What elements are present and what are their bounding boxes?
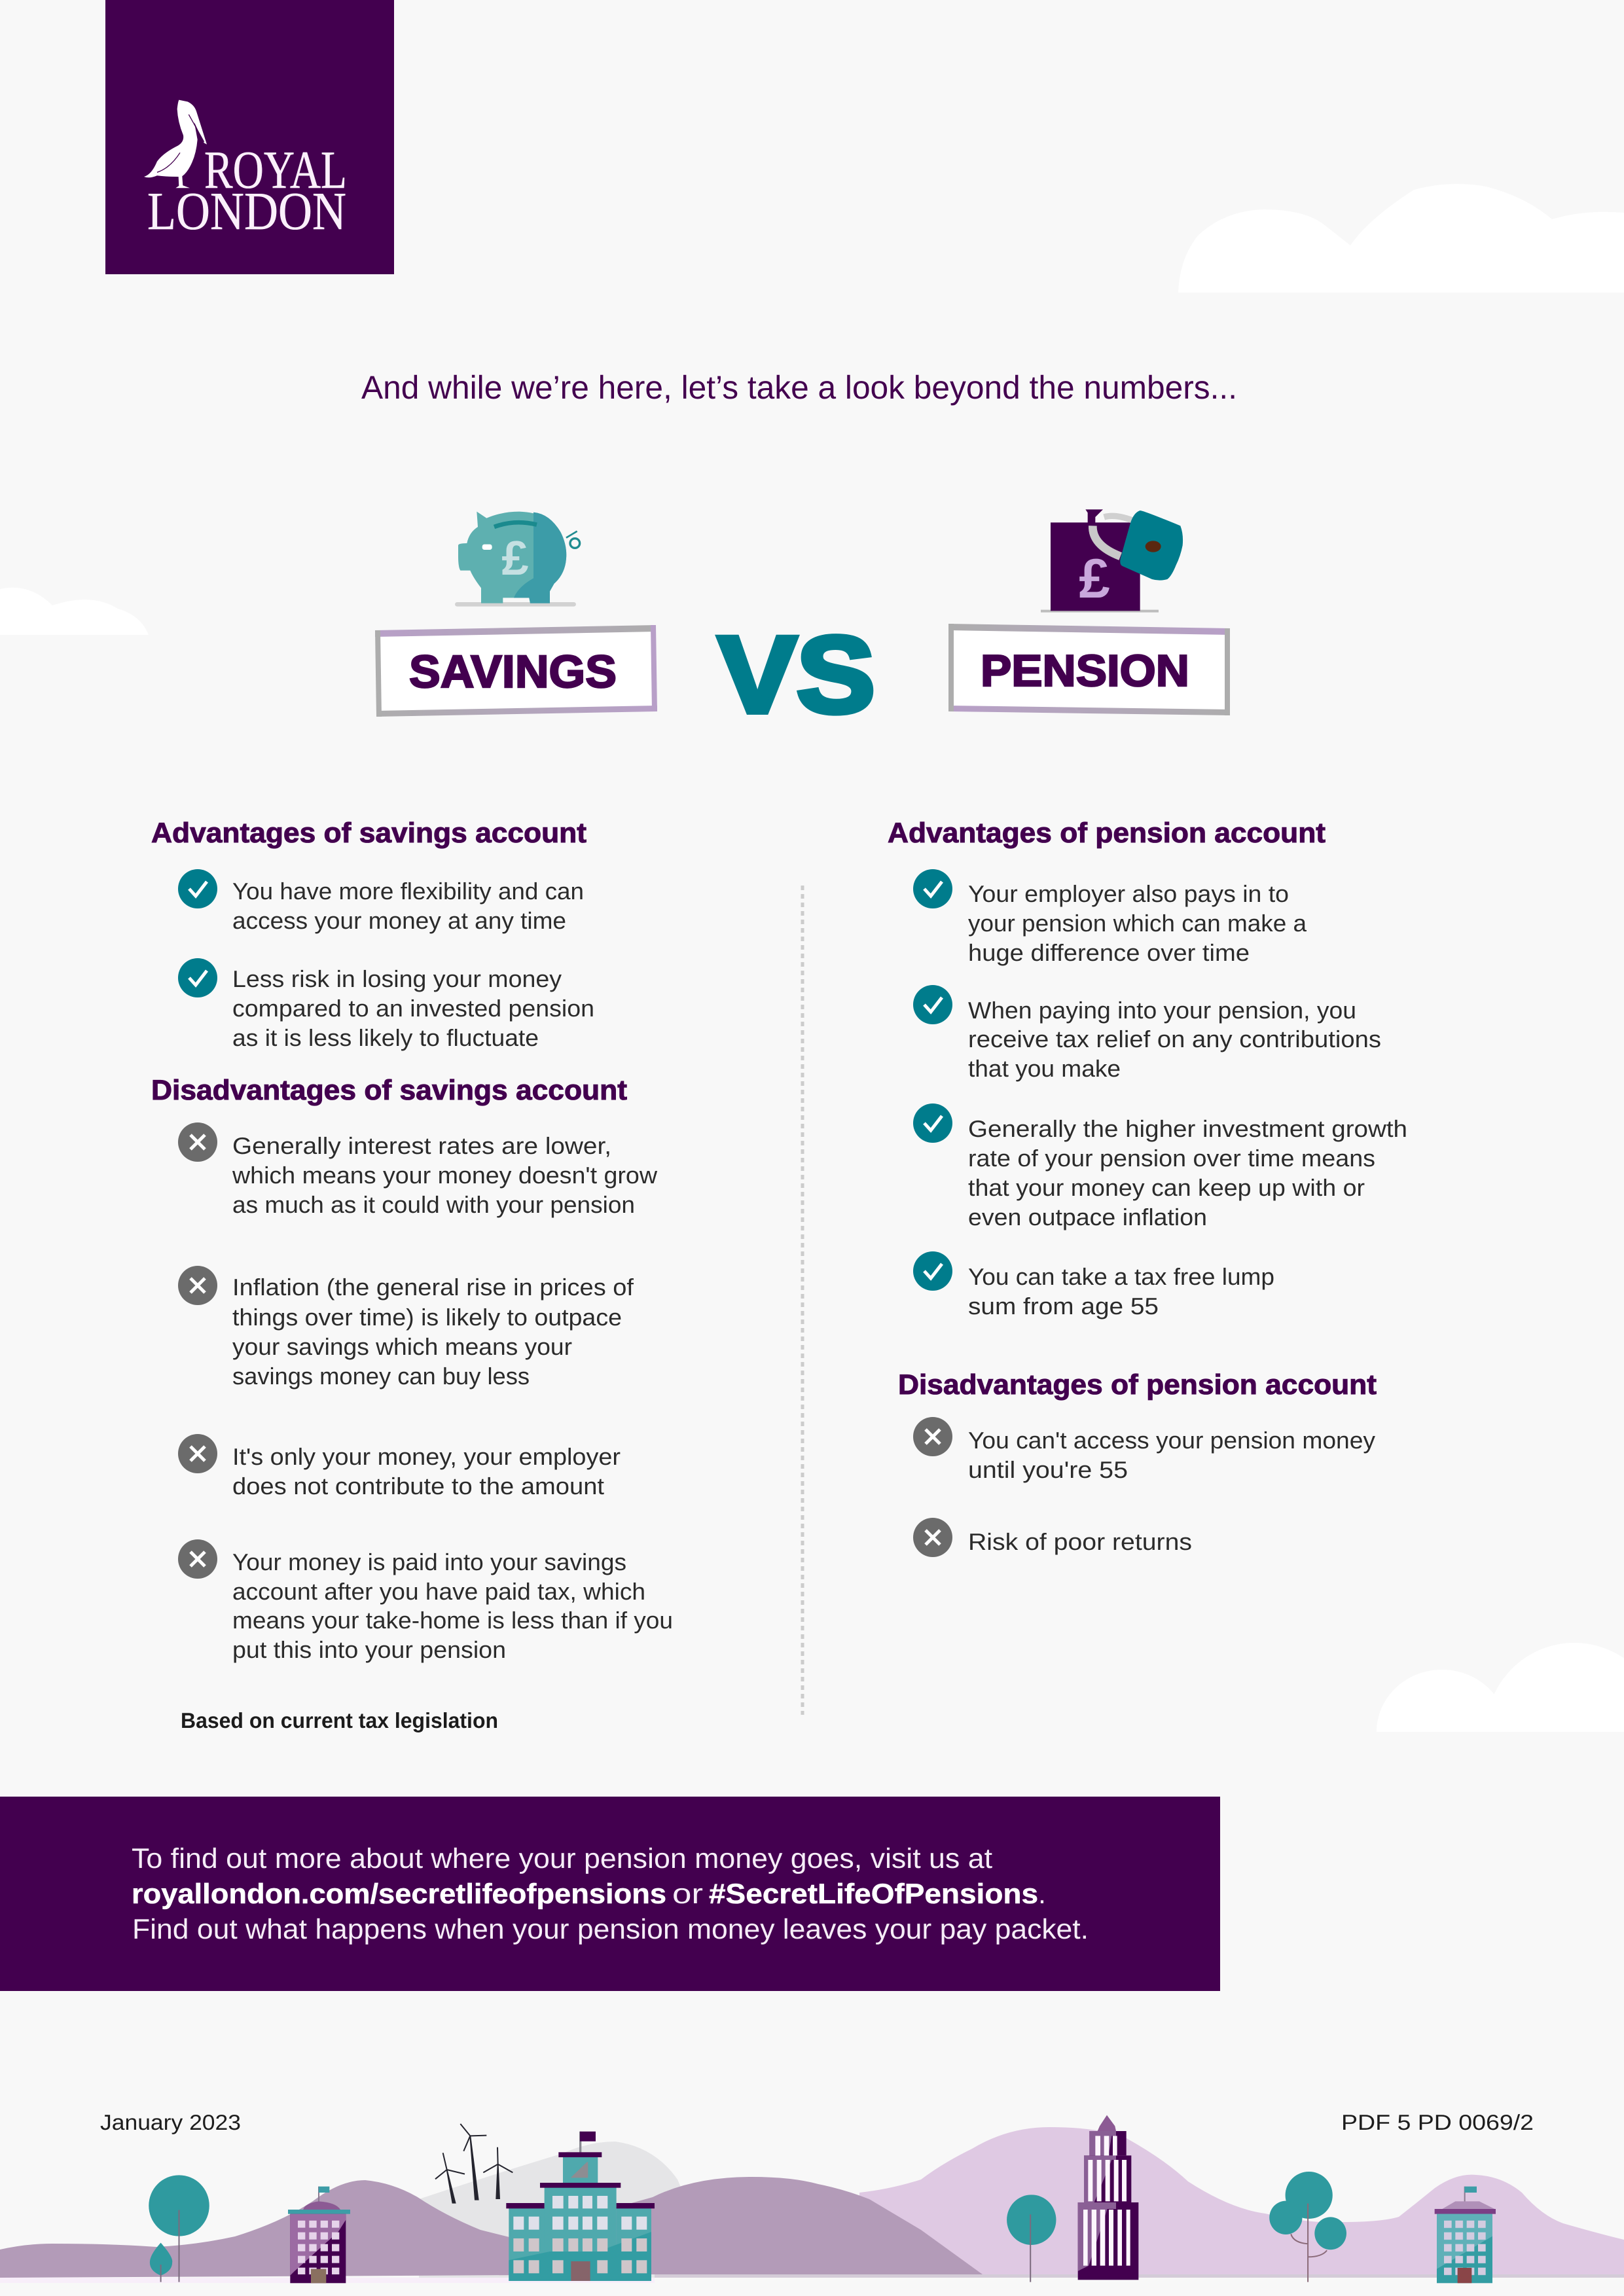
pension disadvantage 1 [913, 1417, 1375, 1483]
savings advantage 1: You have more flexibility and can [232, 878, 584, 905]
footnote: Based on current tax legislation [181, 1708, 498, 1732]
icon: pelican [144, 100, 207, 188]
title: And while we’re here, let’s take a look beyond the numbers... [361, 369, 1237, 406]
icon: pension bag with padlock: £ [1079, 548, 1110, 610]
savings disadvantage 2: Inflation (the general rise in prices of [232, 1274, 634, 1300]
call to action banner [0, 1797, 1220, 1991]
heading: disadvantages of pension account: Disadvantages of pension account [898, 1369, 1377, 1401]
pension advantage 4: sum from age 55 [968, 1293, 1159, 1319]
call to action banner: . [1038, 1878, 1046, 1910]
savings disadvantage 4 [178, 1539, 673, 1663]
heading: advantages of pension account: Advantages of pension account [888, 817, 1326, 849]
call to action banner: or [672, 1878, 703, 1910]
pension advantage 2: When paying into your pension, you [968, 997, 1356, 1024]
call to action banner: To find out more about where your pension money goes, visit us at [132, 1843, 992, 1874]
illustration: wind turbines [435, 2124, 513, 2204]
pension advantage 3: rate of your pension over time means [968, 1145, 1375, 1172]
illustration: purple building [288, 2187, 350, 2283]
illustration: small teal building [1435, 2187, 1496, 2283]
savings disadvantage 4: Your money is paid into your savings [232, 1549, 626, 1575]
savings disadvantage 4: account after you have paid tax, which [232, 1578, 645, 1605]
cloud: lower right [1377, 1643, 1624, 1732]
pension advantage 3: even outpace inflation [968, 1204, 1207, 1230]
illustration: purple tower [1078, 2115, 1138, 2280]
savings disadvantage 1 [178, 1122, 658, 1218]
cloud: top right [1178, 184, 1624, 293]
heading: advantages of savings account: Advantages of savings account [151, 817, 586, 849]
pension advantage 1: huge difference over time [968, 939, 1250, 966]
savings disadvantage 4: put this into your pension [232, 1636, 506, 1663]
panel: savings account [151, 817, 673, 1732]
pension advantage 4: You can take a tax free lump [968, 1263, 1274, 1290]
savings disadvantage 2: things over time) is likely to outpace [232, 1304, 622, 1331]
pension advantage 3: Generally the higher investment growth [968, 1115, 1407, 1142]
illustration: hills [0, 2127, 1624, 2283]
savings disadvantage 1: which means your money doesn't grow [232, 1162, 658, 1189]
pension label box [948, 624, 1230, 715]
savings label box [375, 625, 657, 717]
pension advantage 1 [913, 869, 1307, 966]
pension advantage 4 [913, 1251, 1274, 1319]
pension disadvantage 2 [913, 1518, 1192, 1557]
heading: disadvantages of savings account: Disadvantages of savings account [151, 1075, 627, 1106]
savings disadvantage 3: It's only your money, your employer [232, 1443, 621, 1470]
pension advantage 1: your pension which can make a [968, 910, 1307, 937]
illustration: teal civic building [506, 2132, 655, 2281]
savings disadvantage 1: as much as it could with your pension [232, 1191, 635, 1218]
icon: pension bag with padlock [1041, 509, 1183, 613]
savings advantage 2: Less risk in losing your money [232, 965, 562, 992]
logo wordmark: LONDON [147, 181, 346, 241]
savings advantage 1 [178, 869, 584, 934]
icon: piggy bank: £ [501, 531, 529, 585]
cloud: left [0, 588, 149, 635]
savings disadvantage 3 [178, 1434, 621, 1499]
pension advantage 2: that you make [968, 1055, 1121, 1082]
pension disadvantage 1: You can't access your pension money [968, 1427, 1375, 1454]
savings disadvantage 2 [178, 1266, 634, 1390]
logo wordmark: ROYAL [204, 140, 347, 200]
pension disadvantage 2: Risk of poor returns [968, 1528, 1192, 1555]
logo panel [105, 0, 394, 274]
call to action banner: Find out what happens when your pension money leaves your pay packet. [132, 1914, 1089, 1945]
illustration: right trees [1007, 2172, 1346, 2282]
logo wordmark [147, 140, 347, 241]
pension advantage 3: that your money can keep up with or [968, 1174, 1365, 1201]
savings label box: SAVINGS [409, 646, 617, 697]
savings advantage 2: as it is less likely to fluctuate [232, 1024, 539, 1051]
call to action banner: royallondon.com/secretlifeofpensions [132, 1878, 666, 1910]
savings advantage 2 [178, 958, 594, 1051]
VS: VS [718, 615, 875, 736]
pension advantage 2 [913, 985, 1381, 1082]
savings disadvantage 2: savings money can buy less [232, 1363, 530, 1390]
call to action banner: #SecretLifeOfPensions [709, 1878, 1038, 1910]
pension advantage 3 [913, 1103, 1407, 1230]
icon: piggy bank [455, 512, 580, 607]
footer document code: PDF 5 PD 0069/2 [1341, 2110, 1534, 2134]
savings advantage 1: access your money at any time [232, 907, 566, 934]
panel: pension account [888, 817, 1407, 1557]
pension disadvantage 1: until you're 55 [968, 1456, 1128, 1483]
footer date: January 2023 [100, 2110, 241, 2134]
savings disadvantage 1: Generally interest rates are lower, [232, 1132, 611, 1159]
savings disadvantage 3: does not contribute to the amount [232, 1473, 604, 1499]
savings disadvantage 4: means your take-home is less than if you [232, 1607, 673, 1634]
savings disadvantage 2: your savings which means your [232, 1333, 572, 1360]
pension advantage 2: receive tax relief on any contributions [968, 1026, 1381, 1052]
illustration: left trees [149, 2175, 209, 2282]
pension advantage 1: Your employer also pays in to [968, 880, 1289, 907]
pension label box: PENSION [981, 646, 1189, 696]
savings advantage 2: compared to an invested pension [232, 995, 594, 1022]
